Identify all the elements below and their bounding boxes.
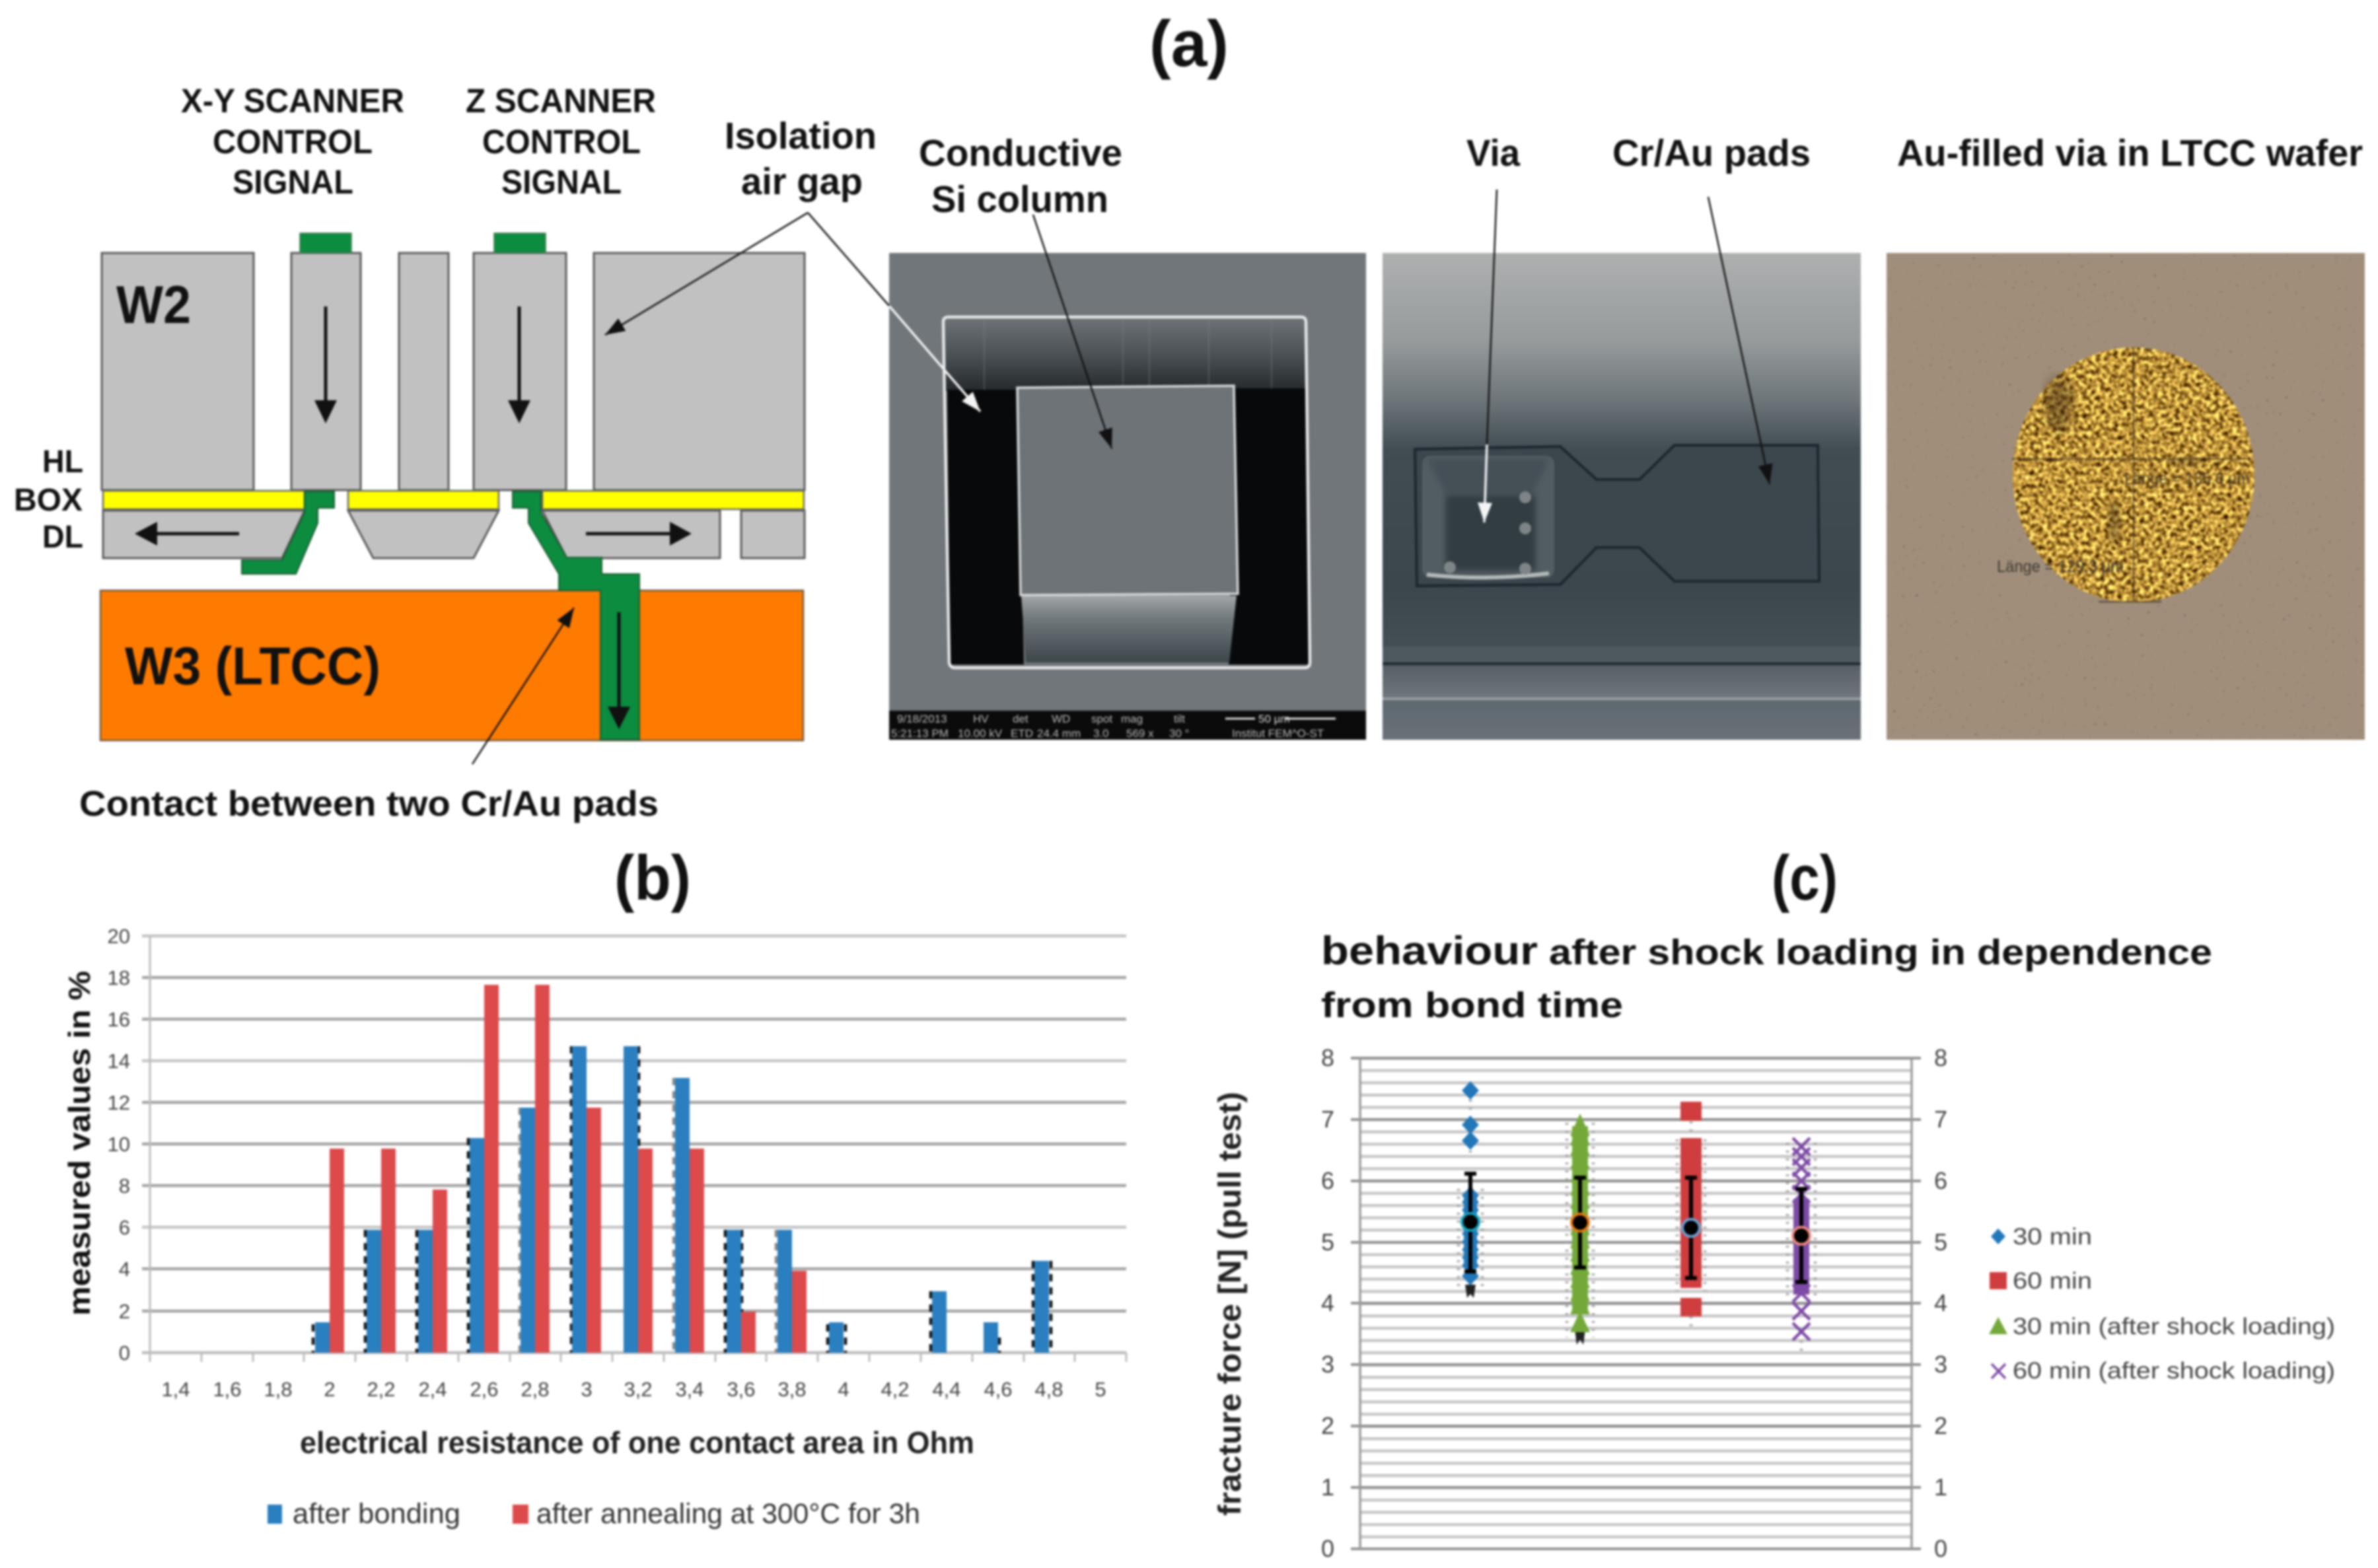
- chart title: behaviour: [1321, 929, 1538, 973]
- SEM info bar: det: [1013, 713, 1028, 725]
- series: 30 min: [1462, 1081, 1479, 1285]
- x axis labels: 2,4: [418, 1378, 447, 1401]
- y axis labels: 14: [108, 1050, 130, 1073]
- labels: layer names: DL: [42, 520, 83, 555]
- SEM info bar: [889, 711, 1366, 740]
- green top contact pads: [300, 233, 546, 253]
- left y axis labels: 0: [1321, 1535, 1334, 1562]
- legend: 60 min (after shock loading): [2013, 1358, 2335, 1384]
- x axis labels: 2,2: [367, 1378, 396, 1401]
- left y axis labels: 7: [1321, 1106, 1334, 1133]
- chart title: after shock loading in dependence: [1549, 933, 2212, 972]
- panel: SEM image of conductive Si column: [889, 132, 1366, 740]
- y axis labels: 0: [119, 1341, 130, 1365]
- label: W2: W2: [116, 275, 191, 335]
- label: W3 (LTCC): W3 (LTCC): [125, 637, 380, 696]
- via image lower steps: [1383, 647, 1861, 740]
- title: panel (c): (c): [1772, 843, 1838, 913]
- x axis labels: 3,6: [727, 1378, 756, 1401]
- measurement lines: [2012, 347, 2251, 602]
- SEM cavity rim: [943, 317, 1310, 668]
- SEM info bar: tilt: [1174, 713, 1185, 725]
- legend: [268, 1498, 920, 1530]
- x axis labels: 4,4: [932, 1378, 961, 1401]
- y axis labels: 6: [119, 1216, 130, 1239]
- right y axis labels: 0: [1934, 1535, 1947, 1562]
- SEM info bar: 50 µm: [1258, 713, 1290, 725]
- y axis labels: 2: [119, 1300, 130, 1323]
- via image background: [1383, 253, 1861, 740]
- title: panel (a): (a): [1149, 7, 1229, 80]
- arrow: via pointer: [1484, 190, 1497, 522]
- yellow buried oxide layer: [103, 491, 804, 509]
- legend: 30 min: [2013, 1224, 2092, 1250]
- faint scatter labels: [1459, 1100, 1815, 1351]
- x axis labels: 4,2: [881, 1378, 910, 1401]
- label: Via: Via: [1466, 132, 1521, 174]
- y axis labels: 10: [108, 1133, 130, 1156]
- black scatter blobs: [1465, 1285, 1585, 1345]
- SEM cavity upper wall: [945, 318, 1305, 391]
- label: X-Y scanner control signal: X-Y SCANNER: [181, 82, 404, 120]
- panel: SEM image of via and Cr/Au pads: [1383, 132, 1861, 740]
- Cr/Au pad shape: [1415, 445, 1819, 586]
- dashed bar outlines: [313, 1046, 1051, 1353]
- gold via disk: [2013, 347, 2254, 602]
- label: Z scanner control signal: [466, 82, 656, 201]
- SEM dark trenches: [947, 388, 1310, 664]
- SEM info bar: Institut FEM^O-ST: [1232, 727, 1324, 740]
- title: panel (b): (b): [614, 843, 691, 913]
- panel: scatter chart of fracture force: [1213, 1044, 2335, 1562]
- SEM info bar: ETD: [1011, 727, 1033, 740]
- SEM info bar: spot: [1091, 713, 1112, 725]
- left y axis labels: [1321, 1044, 1334, 1562]
- x axis labels: 2: [324, 1378, 336, 1401]
- left y axis labels: 8: [1321, 1044, 1334, 1071]
- SEM column side face: [1021, 596, 1237, 662]
- W3 LTCC wafer: [100, 590, 803, 740]
- right y axis labels: 4: [1934, 1289, 1947, 1316]
- panel: Au-filled via micrograph: [1887, 132, 2365, 740]
- legend: after bonding: [293, 1498, 460, 1530]
- x axis labels: 1,8: [264, 1378, 293, 1401]
- y axis labels: 18: [108, 966, 130, 989]
- right y axis labels: 2: [1934, 1412, 1947, 1439]
- x axis labels: 1,4: [161, 1378, 190, 1401]
- arrow: Cr/Au pad pointer: [1708, 197, 1770, 484]
- arrow: Si column pointer: [1033, 215, 1112, 448]
- x axis labels: 3,4: [675, 1378, 704, 1401]
- panel: device cross-section schematic: [14, 82, 805, 824]
- SEM info bar: HV: [973, 713, 989, 725]
- y axis title: fracture force [N] (pull test): [1213, 1092, 1248, 1516]
- y axis labels: 8: [119, 1174, 130, 1197]
- arrow: contact pointer: [472, 608, 574, 764]
- x axis labels: 4: [838, 1378, 849, 1401]
- green metal trace right with via: [513, 491, 639, 740]
- right y axis labels: [1934, 1044, 1947, 1562]
- x axis labels: 3,8: [777, 1378, 807, 1401]
- SEM info bar: 9/18/2013: [897, 713, 947, 725]
- x axis labels: 5: [1095, 1378, 1106, 1401]
- SEM info bar: WD: [1052, 713, 1070, 725]
- label: Au-filled via: Au-filled via in LTCC wafer: [1897, 132, 2363, 174]
- label and arrows: isolation air gap: air gap: [741, 160, 863, 203]
- y axis title: measured values in %: [62, 971, 96, 1316]
- label and arrows: isolation air gap: [605, 115, 980, 411]
- lower silicon layer DL: [103, 511, 805, 558]
- x axis title: electrical resistance of one contact area in Ohm: [300, 1425, 974, 1460]
- measurement labels: [1997, 470, 2250, 576]
- micrograph background: [1887, 253, 2365, 740]
- right y axis labels: 6: [1934, 1167, 1947, 1194]
- series: after annealing: [330, 985, 807, 1353]
- left y axis labels: 2: [1321, 1412, 1334, 1439]
- left y axis labels: 5: [1321, 1229, 1334, 1256]
- left y axis labels: 1: [1321, 1474, 1334, 1501]
- x axis labels: 1,6: [213, 1378, 242, 1401]
- label: Z scanner control signal: CONTROL: [482, 123, 641, 160]
- y axis labels: 20: [108, 925, 130, 948]
- series: 60 min after shock loading: [1793, 1138, 1810, 1340]
- label: X-Y scanner control signal: SIGNAL: [233, 163, 353, 201]
- SEM column top square: [1017, 386, 1238, 595]
- x axis labels: 4,8: [1034, 1378, 1063, 1401]
- left y axis labels: 3: [1321, 1351, 1334, 1378]
- right y axis labels: 7: [1934, 1106, 1947, 1133]
- SEM background: [889, 253, 1366, 740]
- SEM info bar: 24.4 mm: [1037, 727, 1081, 740]
- right y axis labels: 1: [1934, 1474, 1947, 1501]
- chart title: from bond time: [1321, 985, 1623, 1025]
- SEM info bar: 30 °: [1169, 727, 1189, 740]
- x axis labels: 3,2: [624, 1378, 653, 1401]
- gridlines: [142, 936, 1126, 1362]
- SEM info bar: mag: [1121, 713, 1143, 725]
- error bars: [1464, 1174, 1807, 1282]
- via well: [1422, 456, 1554, 578]
- arrows: signal direction: [135, 306, 692, 729]
- panel: bar chart of electrical resistance: [62, 925, 1126, 1530]
- right y axis labels: 5: [1934, 1229, 1947, 1256]
- label: conductive Si column: [919, 132, 1122, 221]
- left y axis labels: 6: [1321, 1167, 1334, 1194]
- legend: 30 min (after shock loading): [2013, 1314, 2335, 1339]
- label: conductive Si column: Conductive: [919, 132, 1122, 174]
- gridlines: [1351, 1057, 1921, 1549]
- labels: layer names: HL: [42, 445, 83, 480]
- wafer W2 columns: [102, 253, 805, 490]
- y axis labels: 12: [108, 1091, 130, 1114]
- SEM info bar: 5:21:13 PM: [891, 727, 949, 740]
- x axis labels: 3: [581, 1378, 593, 1401]
- SEM info bar: 3.0: [1093, 727, 1109, 740]
- x axis labels: 2,6: [470, 1378, 499, 1401]
- x axis labels: 4,6: [984, 1378, 1013, 1401]
- y axis labels: [108, 925, 130, 1365]
- y axis labels: 4: [119, 1258, 130, 1281]
- left y axis labels: 4: [1321, 1289, 1334, 1316]
- label: X-Y scanner control signal: [181, 82, 404, 201]
- series: 30 min after shock loading: [1570, 1114, 1590, 1332]
- label: X-Y scanner control signal: CONTROL: [213, 123, 373, 160]
- right y axis labels: 3: [1934, 1351, 1947, 1378]
- legend: after annealing at 300°C for 3h: [536, 1498, 920, 1530]
- series: 60 min: [1680, 1102, 1702, 1316]
- label and arrows: isolation air gap: Isolation: [725, 115, 877, 157]
- label: conductive Si column: Si column: [931, 178, 1108, 221]
- mean markers: [1462, 1213, 1810, 1244]
- green metal trace left: [242, 491, 334, 574]
- label: Z scanner control signal: Z SCANNER: [466, 82, 656, 120]
- labels: layer names: [14, 445, 83, 555]
- chart title: [1321, 929, 2212, 1025]
- right y axis labels: 8: [1934, 1044, 1947, 1071]
- series: after bonding: [315, 1046, 1049, 1353]
- label: contact between pads: Contact between two Cr/Au pads: [79, 784, 659, 824]
- legend: 60 min: [2013, 1268, 2092, 1294]
- y axis labels: 16: [108, 1008, 130, 1031]
- SEM info bar: 10.00 kV: [958, 727, 1003, 740]
- x axis labels: [161, 1378, 1106, 1401]
- label: Cr/Au pads: Cr/Au pads: [1612, 132, 1811, 174]
- x axis labels: 2,8: [521, 1378, 550, 1401]
- measurement labels: Länge = 135,6 µm: [2124, 470, 2250, 488]
- legend: [1989, 1224, 2335, 1384]
- label: Z scanner control signal: SIGNAL: [501, 163, 622, 201]
- measurement labels: Länge = 129,3 µm: [1997, 557, 2124, 576]
- SEM info bar: 569 x: [1126, 727, 1154, 740]
- labels: layer names: BOX: [14, 483, 83, 518]
